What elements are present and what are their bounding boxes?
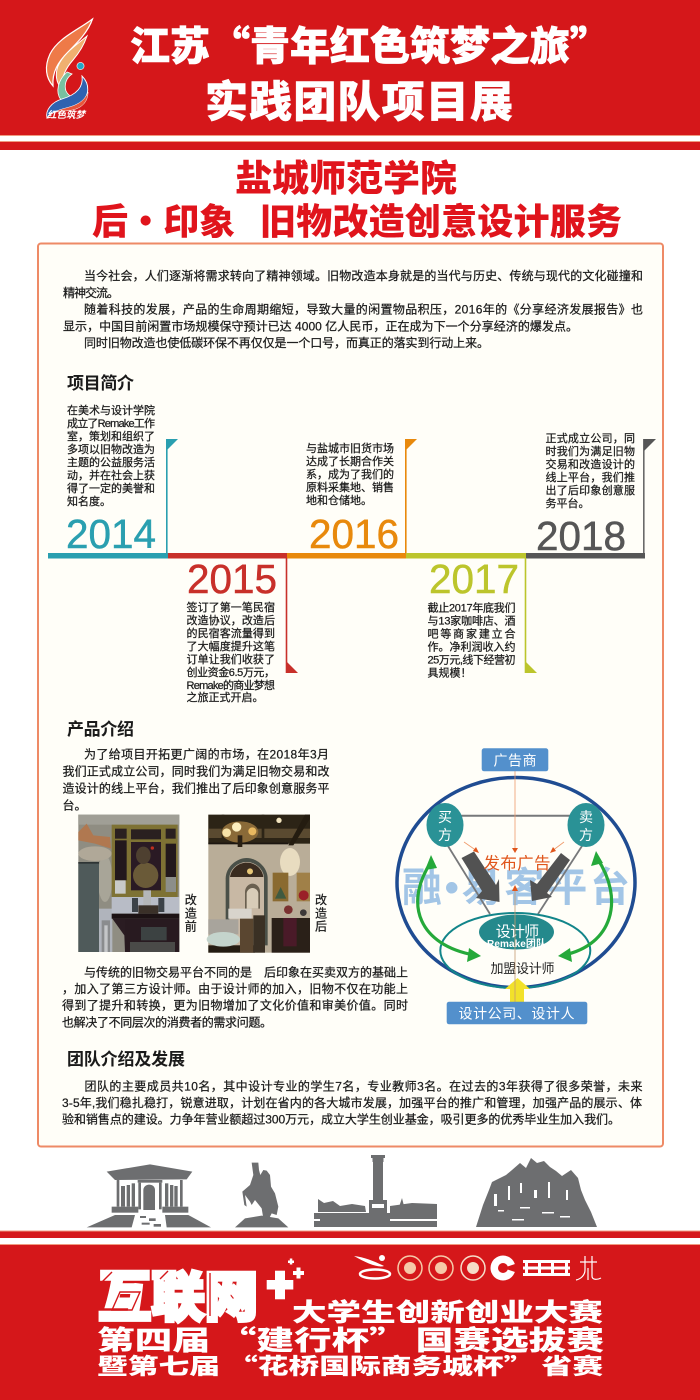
project name: 旧物改造创意设计服务: [260, 193, 622, 245]
milestone 2015: 改造协议，改造后: [186, 613, 275, 627]
milestone 2017: 2017: [429, 556, 519, 602]
milestone 2018: 2018: [536, 513, 626, 559]
milestone 2015: 签订了第一笔民宿: [186, 600, 275, 614]
milestone 2018: 正式成立公司，同: [546, 431, 635, 445]
milestone 2014: 多项以旧物改造为: [67, 442, 155, 456]
team text: 3-5年,我们稳扎稳打，锐意进取，计划在省内的各大城市发展，加强平台的推广和管理，加强产品的展示、体: [62, 1095, 642, 1110]
product text: [62, 746, 330, 812]
title line 1: 江苏“青年红色筑梦之旅”: [130, 14, 610, 72]
dark arrows toward designer: [462, 852, 570, 902]
milestone 2015: 订单让我们收获了: [186, 652, 275, 666]
milestone 2015: 之旅正式开启。: [186, 690, 264, 704]
milestone 2017: 截止2017年底我们: [428, 600, 516, 614]
platform diagram: [397, 748, 635, 1024]
wordmark accents: [101, 1271, 210, 1316]
milestone 2015: 了大幅度提升这笔: [186, 639, 275, 653]
label: after: 造: [315, 906, 327, 920]
milestone 2014: 成立了Remake工作: [67, 416, 155, 430]
box: design companies: 设计公司、设计人: [458, 1006, 574, 1022]
product differentiation text: 也解决了不同层次的消费者的需求问题。: [62, 1014, 272, 1030]
icon: plus signs: [267, 1258, 304, 1299]
seller node: [568, 803, 604, 847]
heading: team: 团队介绍及发展: [67, 1049, 185, 1069]
provincial competition: 暨第七届 “花桥国际商务城杯” 省赛: [97, 1349, 603, 1381]
project name: 后・印象: [92, 193, 235, 245]
label: before: 造: [185, 906, 197, 920]
label: after: 改: [315, 893, 327, 907]
milestone 2016: 地和仓储地。: [306, 493, 372, 507]
Internet Plus wordmark: 互联网: [98, 1253, 258, 1332]
milestone 2017: 与13家咖啡店、酒: [428, 614, 516, 628]
milestone 2018: [536, 431, 656, 559]
logo: calligraphic mark: [576, 1256, 601, 1280]
milestone 2018: 线上平台，我们推: [546, 470, 635, 484]
team text: 团队的主要成员共10名，其中设计专业的学生7名，专业教师3名。在过去的3年获得了很多荣誉，未来: [84, 1078, 642, 1094]
product differentiation text: ，加入了第三方设计师。由于设计师的加入，旧物不仅在功能上: [62, 981, 408, 996]
milestone 2016: 2016: [309, 511, 399, 557]
competition name: 大学生创新创业大赛: [292, 1293, 603, 1329]
project school heading: [92, 149, 622, 245]
yellow up arrow: [505, 978, 530, 1002]
watermark: platform name: 融•易客平台: [402, 866, 630, 910]
project name: [92, 193, 622, 245]
milestone 2017: 25万元,线下经营初: [428, 652, 516, 666]
outer ellipse: [397, 778, 635, 988]
milestone 2017: 具规模！: [428, 666, 472, 680]
inner ellipse: franchise designers: [440, 913, 590, 988]
milestone 2014: 动，并在社会上获: [67, 468, 155, 482]
silhouette: equestrian statue: [235, 1163, 288, 1227]
seller node: 方: [579, 827, 593, 843]
logo: bank: [490, 1256, 518, 1280]
box: design companies: [447, 1002, 587, 1024]
milestone 2018: 时我们为满足旧物: [546, 444, 635, 458]
product differentiation text: 得到了提升和转换，更为旧物增加了文化价值和审美价值。同时: [62, 998, 408, 1012]
landmark silhouettes: [87, 1155, 597, 1227]
milestone 2016: 原料采集地、销售: [306, 480, 394, 494]
buyer node: [426, 803, 464, 847]
intro text block: 精神交流。: [63, 285, 119, 300]
intro text block: 随着科技的发展，产品的生命周期缩短，导致大量的闲置物品积压，2016年的《分享经济发展报告》也: [84, 302, 643, 316]
milestone 2017: 吧等商家建立合: [428, 626, 516, 640]
milestone 2015: 2015: [187, 556, 277, 602]
milestone 2018: 交易和改造设计的: [546, 457, 635, 471]
team text: [62, 1078, 642, 1126]
label: before: 改: [185, 893, 197, 907]
heading: product introduction: 产品介绍: [67, 720, 134, 739]
milestone 2014: 知名度。: [67, 494, 111, 508]
seller node: 卖: [579, 809, 593, 825]
product text: 造设计的线上平台，我们推出了后印象创意服务平: [62, 780, 330, 796]
product differentiation text: 与传统的旧物交易平台不同的是 后印象在买卖双方的基础上: [84, 964, 408, 980]
milestone 2014: 主题的公益服务活: [67, 455, 155, 469]
heading: project overview: 项目简介: [67, 373, 134, 393]
box: advertisers: [482, 748, 548, 771]
competition session: 第四届 “建行杯” 国赛选拔赛: [97, 1319, 604, 1358]
intro text block: 显示，中国目前闲置市场规模保守预计已达 4000 亿人民币，正在成为下一个分享经济的爆发点。: [63, 318, 578, 334]
main content panel: [38, 244, 663, 1146]
milestone 2018: 务平台。: [546, 496, 590, 510]
milestone 2016: 达成了长期合作关: [306, 454, 394, 468]
footer band: [0, 1230, 700, 1400]
silhouette: sculpture group: [476, 1158, 597, 1227]
orange ad arrows: [464, 771, 564, 1002]
school name: 盐城师范学院: [235, 149, 457, 202]
team text: 验和销售点的建设。力争年营业额超过300万元，成立大学生创业基金，吸引更多的优秀毕业生加入我们。: [62, 1112, 620, 1126]
green double arrows: [418, 851, 612, 962]
photo: before renovation: [78, 815, 179, 952]
photo: after renovation: [207, 815, 310, 953]
product text: 台。: [62, 798, 87, 812]
icon: red dream logo: [46, 19, 92, 121]
label: before: 前: [185, 918, 197, 934]
milestone 2014: 在美术与设计学院: [67, 403, 155, 417]
product text: 我们正式成立公司，同时我们为满足旧物交易和改: [62, 764, 330, 778]
milestone 2017: 作。净利润收入约: [428, 640, 516, 654]
silhouette: monument and skyline: [314, 1155, 437, 1227]
intro text block: 同时旧物改造也使低碳环保不再仅仅是一个口号，而真正的落实到行动上来。: [84, 335, 489, 350]
milestone 2016: 与盐城市旧货市场: [306, 441, 394, 455]
logo: swoosh: [354, 1255, 390, 1278]
designer node: 设计师: [496, 924, 539, 940]
milestone 2015: [186, 556, 298, 704]
milestone 2014: 2014: [66, 511, 156, 557]
logo: university seal 2: [429, 1256, 453, 1280]
label: before: [185, 893, 197, 934]
milestone 2015: 的民宿客流量得到: [186, 626, 275, 640]
buyer node: 买: [438, 809, 452, 825]
logo: block mark: [523, 1260, 570, 1276]
milestone 2016: [306, 439, 417, 557]
designer node: Remake团队: [487, 937, 546, 950]
label: franchise designers: 加盟设计师: [490, 961, 554, 976]
milestone 2015: Remake的商业梦想: [186, 678, 275, 692]
milestone 2018: 出了后印象创意服: [546, 483, 635, 497]
product differentiation text: [62, 964, 408, 1030]
label: publish ads: 发布广告: [484, 854, 550, 873]
product text: 为了给项目开拓更广阔的市场，在2018年3月: [84, 746, 329, 762]
intro text block: [63, 268, 643, 350]
box: advertisers: 广告商: [494, 752, 536, 768]
sponsor logos: [354, 1255, 601, 1280]
label: after: [315, 893, 327, 934]
milestone 2016: 系，成为了我们的: [306, 467, 394, 481]
intro text block: 当今社会，人们逐渐将需求转向了精神领域。旧物改造本身就是的当代与历史、传统与现代的文化碰撞和: [84, 268, 643, 283]
title line 2: 实践团队项目展: [205, 68, 513, 130]
milestone 2017: [428, 556, 537, 680]
logo: university seal 3: [461, 1256, 485, 1280]
timeline bar: [48, 553, 645, 558]
designer node: [479, 914, 554, 950]
silhouette: memorial hall: [87, 1164, 211, 1227]
logo caption: 红色筑梦: [47, 107, 86, 121]
header band: [0, 0, 700, 150]
milestone 2014: 得了一定的美誉和: [67, 481, 155, 495]
buyer node: 方: [438, 827, 452, 843]
connector lines: [445, 816, 586, 914]
milestone 2015: 创业资金6.5万元，: [186, 665, 275, 679]
milestone 2014: [66, 403, 178, 557]
timeline: [48, 403, 656, 704]
milestone 2014: 室，策划和组织了: [67, 429, 155, 443]
logo: university seal 1: [398, 1256, 422, 1280]
label: after: 后: [315, 920, 327, 934]
